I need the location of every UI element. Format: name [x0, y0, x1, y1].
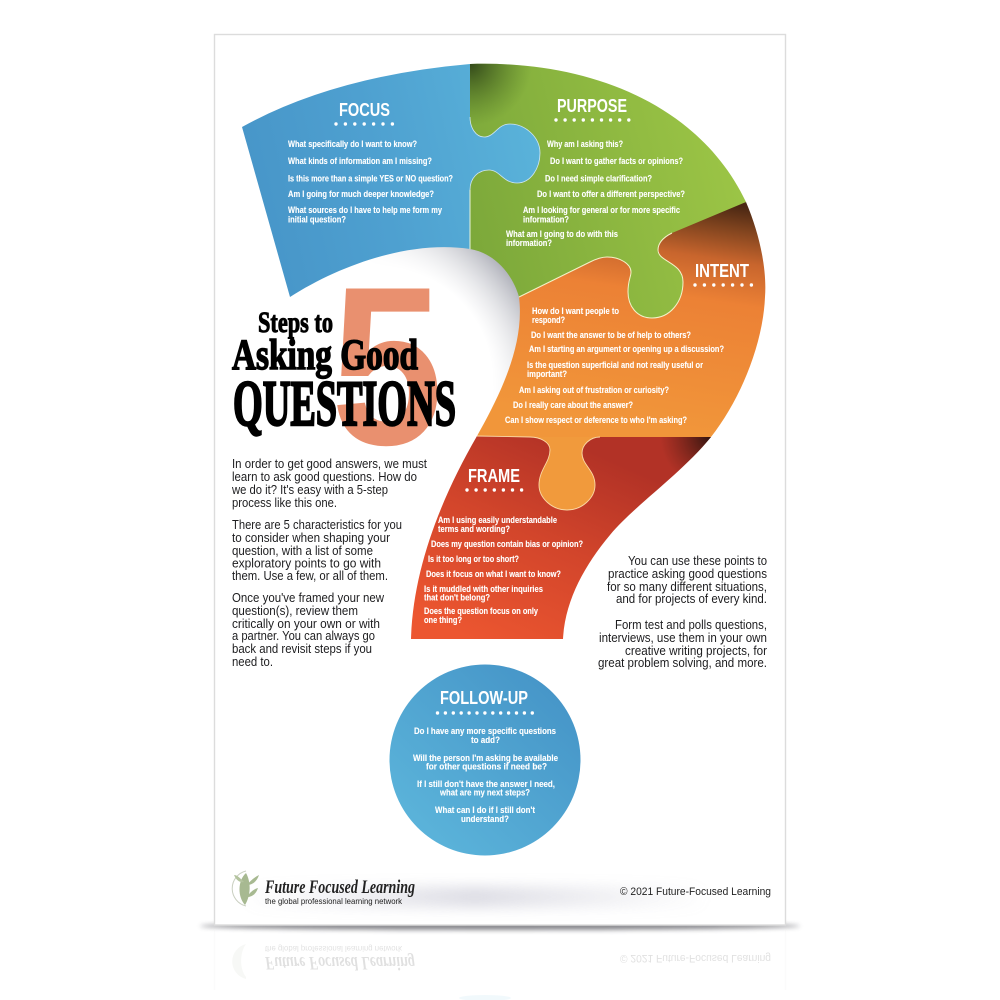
- intro text block: question(s), review them: [232, 604, 358, 618]
- text block: purpose: [506, 95, 685, 248]
- logo wordmark: Future Focused Learning: [264, 877, 415, 898]
- questions: intent: respond?: [532, 315, 565, 325]
- questions: follow-up: what are my next steps?: [439, 788, 530, 798]
- intro text block: exploratory points to go with: [232, 556, 381, 570]
- questions: follow-up: for other questions if need be?: [426, 762, 547, 772]
- logo tagline: the global professional learning network: [265, 896, 403, 906]
- questions: frame: Does my question contain bias or opinion?: [431, 539, 583, 549]
- intro text block: There are 5 characteristics for you: [232, 518, 402, 532]
- questions: follow-up: Do I have any more specific questions: [414, 726, 556, 736]
- questions: frame: [424, 515, 583, 625]
- questions: intent: important?: [527, 369, 567, 379]
- poster reflection: © 2021 Future-Focused Learning: [620, 952, 771, 964]
- heading: frame: FRAME: [468, 465, 520, 486]
- intro text block: In order to get good answers, we must: [232, 457, 427, 471]
- questions: intent: [505, 306, 724, 425]
- panel: purpose: [470, 64, 746, 318]
- questions: intent: Do I want the answer to be of help to others?: [531, 330, 691, 340]
- footer smear shadow: [240, 886, 710, 908]
- dots: follow-up: [438, 711, 534, 715]
- big numeral 5: 5: [331, 239, 443, 492]
- intro text block: process like this one.: [232, 496, 337, 510]
- dots: focus: [336, 122, 393, 126]
- questions: purpose: information?: [523, 214, 569, 224]
- questions: purpose: Do I want to offer a different perspective?: [537, 189, 685, 199]
- title: [232, 306, 456, 440]
- questions: focus: What specifically do I want to know?: [288, 139, 417, 149]
- questions: intent: How do I want people to: [532, 306, 619, 316]
- panel: intent: [477, 202, 765, 510]
- questions: purpose: information?: [506, 238, 552, 248]
- panel: follow-up: [390, 664, 580, 856]
- intro text block: a partner. You can always go: [232, 629, 375, 643]
- questions: frame: one thing?: [424, 615, 462, 625]
- dots: intent: [695, 283, 752, 287]
- closing text block: great problem solving, and more.: [598, 656, 767, 670]
- questions: focus: initial question?: [288, 214, 346, 224]
- questions: focus: Is this more than a simple YES or NO question?: [288, 174, 453, 184]
- title: Steps to: [258, 306, 333, 339]
- questions: frame: Am I using easily understandable: [438, 515, 557, 525]
- copyright: © 2021 Future-Focused Learning: [620, 886, 771, 898]
- heading: follow-up: FOLLOW-UP: [440, 687, 528, 708]
- title: QUESTIONS: [233, 368, 456, 440]
- questions: intent: Can I show respect or deference to who I'm asking?: [505, 415, 687, 425]
- questions: follow-up: understand?: [461, 814, 509, 824]
- questions: purpose: Am I looking for general or for more specific: [523, 205, 680, 215]
- heading: purpose: PURPOSE: [557, 95, 627, 116]
- icon: bamboo leaves: [232, 871, 259, 906]
- intro text block: learn to ask good questions. How do: [232, 470, 417, 484]
- questions: purpose: Do I need simple clarification?: [545, 174, 652, 184]
- questions: frame: terms and wording?: [438, 524, 510, 534]
- panel: focus: [242, 64, 540, 297]
- poster reflection: Future Focused Learning: [264, 952, 415, 973]
- closing text block: for so many different situations,: [607, 580, 767, 594]
- panel: frame: [411, 436, 711, 639]
- intro text block: question, with a list of some: [232, 544, 373, 558]
- floor shadow under poster: [200, 922, 800, 930]
- title: Asking Good: [232, 332, 418, 379]
- questions: focus: Am I going for much deeper knowledge?: [288, 189, 434, 199]
- text block: intent: [505, 260, 752, 425]
- questions: frame: that don't belong?: [424, 592, 490, 602]
- question mark graphic: [242, 64, 765, 639]
- questions: purpose: Do I want to gather facts or opinions?: [550, 156, 683, 166]
- poster reflection: [214, 930, 786, 1000]
- heading: focus: FOCUS: [339, 99, 390, 120]
- intent puzzle tab: [530, 437, 600, 510]
- dots: purpose: [556, 118, 630, 122]
- questions: purpose: [506, 139, 685, 248]
- intro text block: Once you've framed your new: [232, 591, 385, 605]
- questions: frame: Is it too long or too short?: [428, 554, 519, 564]
- dots: frame: [467, 488, 524, 492]
- follow-up circle: [390, 664, 580, 856]
- questions: frame: Does it focus on what I want to know?: [426, 569, 561, 579]
- questions: purpose: What am I going to do with this: [506, 229, 618, 239]
- poster sheet: [214, 34, 786, 925]
- questions: follow-up: What can I do if I still don't: [435, 805, 535, 815]
- intro text block: [231, 457, 427, 669]
- questions: follow-up: to add?: [471, 735, 500, 745]
- text block: focus: [288, 99, 453, 224]
- questions: focus: [288, 139, 453, 224]
- questions: follow-up: Will the person I'm asking be available: [413, 753, 558, 763]
- questions: intent: Am I asking out of frustration or curiosity?: [519, 385, 669, 395]
- closing text block: Form test and polls questions,: [615, 618, 767, 632]
- questions: intent: Am I starting an argument or opening up a discussion?: [529, 344, 724, 354]
- intro text block: back and revisit steps if you: [232, 642, 372, 656]
- questions: purpose: Why am I asking this?: [547, 139, 623, 149]
- heading: intent: INTENT: [695, 260, 750, 281]
- questions: intent: Do I really care about the answer?: [513, 400, 633, 410]
- questions: frame: Is it muddled with other inquiries: [424, 584, 543, 594]
- closing text block: practice asking good questions: [608, 567, 767, 581]
- intro text block: we do it? It's easy with a 5-step: [231, 483, 388, 497]
- footer logo: [232, 871, 415, 906]
- questions: follow-up: If I still don't have the answer I need,: [417, 779, 555, 789]
- intro text block: critically on your own or with: [232, 617, 380, 631]
- questions: follow-up: [413, 726, 558, 824]
- closing text block: and for projects of every kind.: [616, 592, 767, 606]
- text block: frame: [424, 465, 583, 625]
- closing text block: creative writing projects, for: [625, 644, 767, 658]
- intro text block: need to.: [232, 655, 273, 669]
- questions: focus: What sources do I have to help me form my: [288, 205, 442, 215]
- closing text block: [598, 554, 767, 670]
- questions: focus: What kinds of information am I missing?: [288, 156, 432, 166]
- closing text block: You can use these points to: [628, 554, 767, 568]
- questions: frame: Does the question focus on only: [424, 606, 538, 616]
- closing text block: interviews, use them in your own: [599, 631, 767, 645]
- intro text block: to consider when shaping your: [232, 531, 390, 545]
- intro text block: them. Use a few, or all of them.: [232, 569, 388, 583]
- questions: intent: Is the question superficial and not really useful or: [527, 360, 703, 370]
- poster reflection: the global professional learning network: [265, 944, 403, 954]
- inner shadow of question mark hollow: [402, 247, 520, 376]
